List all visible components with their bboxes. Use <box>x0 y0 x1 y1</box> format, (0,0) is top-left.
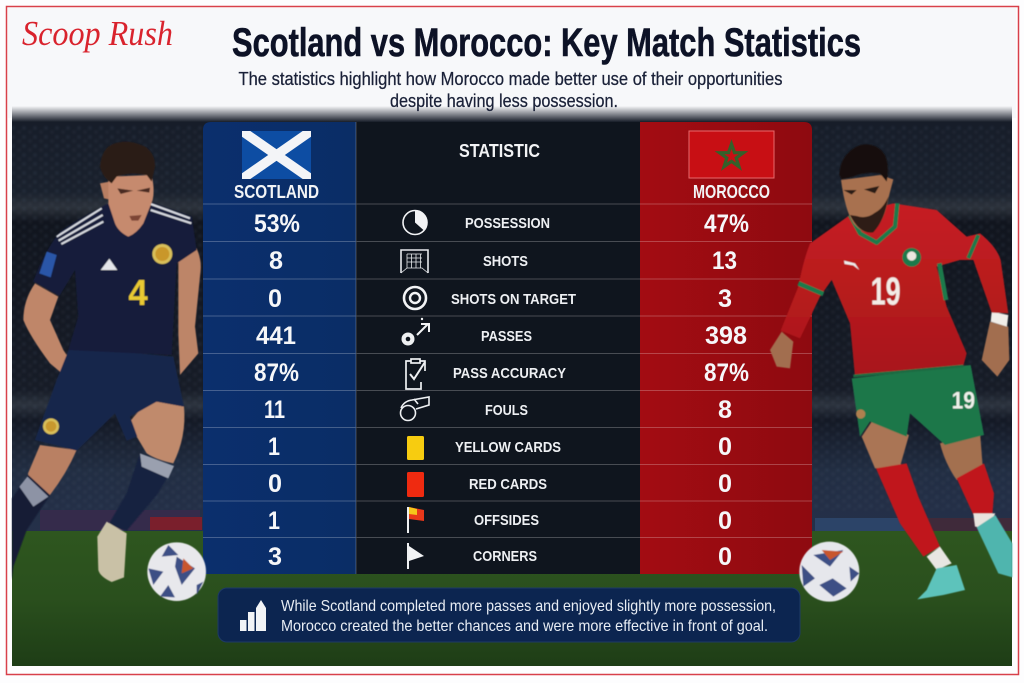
Morocco near leg <box>862 422 965 599</box>
Scotland far leg <box>12 445 77 580</box>
Morocco values: 47% <box>704 210 749 238</box>
Scotland values: 87% <box>254 359 299 387</box>
Scotland arms <box>23 248 201 377</box>
Morocco values: 8 <box>718 396 732 424</box>
callout text: While Scotland completed more passes and enjoyed slightly more possession, <box>281 598 776 615</box>
Scotland shorts <box>35 347 184 451</box>
icon: passes <box>402 318 429 346</box>
Scotland column <box>203 122 356 574</box>
Scotland values: 53% <box>254 210 300 238</box>
icon: rising bars <box>240 600 266 631</box>
Scotland values: 441 <box>256 322 296 350</box>
statistic labels: OFFSIDES <box>474 512 539 529</box>
statistic labels: YELLOW CARDS <box>455 439 561 456</box>
callout text: Morocco created the better chances and were more effective in front of goal. <box>281 618 768 635</box>
Puma mark <box>844 261 859 270</box>
statistic labels: PASS ACCURACY <box>453 365 566 382</box>
Morocco values: 398 <box>705 322 747 350</box>
icon: clipboard <box>406 359 425 389</box>
Morocco label: MOROCCO <box>693 182 770 202</box>
row dividers <box>203 122 812 574</box>
stadium crowd <box>12 106 1015 536</box>
statistic labels: SHOTS ON TARGET <box>451 291 576 308</box>
Morocco shirt <box>781 203 1008 377</box>
statistic labels: SHOTS <box>483 253 528 270</box>
Scotland near leg <box>97 402 184 582</box>
subtitle: despite having less possession. <box>390 91 618 111</box>
Morocco ball <box>799 542 859 602</box>
stats table <box>203 122 812 574</box>
Scotland values: 0 <box>268 470 282 498</box>
Morocco far leg <box>940 432 1012 577</box>
Scotland stripes <box>57 204 191 244</box>
statistic heading: STATISTIC <box>459 141 540 161</box>
title: Scotland vs Morocco: Key Match Statistics <box>232 21 861 65</box>
Scotland sleeve badge <box>39 252 57 277</box>
Morocco shorts <box>852 365 984 445</box>
callout panel <box>218 588 800 642</box>
logo: Scoop Rush <box>22 14 173 53</box>
statistic labels: CORNERS <box>473 548 537 565</box>
Scotland values <box>254 210 300 571</box>
Morocco hands <box>770 312 1009 377</box>
icon: whistle <box>400 397 429 420</box>
icon: yellow card <box>407 436 424 460</box>
Morocco values: 13 <box>712 247 737 275</box>
Scotland values: 0 <box>268 285 282 313</box>
Scotland label: SCOTLAND <box>234 182 319 202</box>
Morocco shorts number: 19 <box>952 387 975 414</box>
Scotland values: 11 <box>264 396 285 424</box>
icon: possession pie <box>403 210 427 234</box>
Morocco flag <box>689 131 774 178</box>
Morocco column <box>640 122 812 574</box>
player: Scotland <box>12 142 206 601</box>
Morocco values <box>704 210 749 571</box>
Morocco crest <box>856 248 921 419</box>
Scotland values: 3 <box>268 543 282 571</box>
Morocco head <box>839 144 893 233</box>
callout <box>218 588 800 642</box>
icon: offside flag <box>407 507 424 533</box>
Morocco number: 19 <box>871 269 901 313</box>
Scotland ball <box>147 542 206 601</box>
icon: goal <box>401 250 428 273</box>
subtitle <box>238 69 782 111</box>
Morocco trim <box>798 203 978 376</box>
pitch <box>12 531 1012 666</box>
Scotland values: 1 <box>268 433 280 461</box>
callout text <box>281 598 776 635</box>
player: Morocco <box>770 144 1012 602</box>
statistic labels: PASSES <box>481 328 532 345</box>
top fade <box>12 106 1012 122</box>
statistic labels <box>451 215 576 565</box>
statistic labels: FOULS <box>485 402 528 419</box>
statistic labels: POSSESSION <box>465 215 550 232</box>
statistic labels: RED CARDS <box>469 476 547 493</box>
Morocco values: 87% <box>704 359 749 387</box>
Morocco values: 0 <box>718 433 732 461</box>
Scotland values: 1 <box>268 507 280 535</box>
Morocco values: 0 <box>718 507 732 535</box>
Morocco values: 0 <box>718 470 732 498</box>
Scotland shirt <box>33 202 197 355</box>
icon: target <box>404 287 426 309</box>
Scotland flag <box>242 131 311 179</box>
Scotland values: 8 <box>269 247 283 275</box>
subtitle: The statistics highlight how Morocco made better use of their opportunities <box>238 69 782 89</box>
Scotland crest <box>43 244 172 434</box>
icon: corner flag <box>407 543 424 569</box>
icon: red card <box>407 472 424 497</box>
Morocco values: 3 <box>718 285 732 313</box>
Adidas mark <box>101 259 117 270</box>
Scotland number: 4 <box>128 272 148 313</box>
header band <box>8 8 1016 118</box>
statistic column <box>356 122 640 574</box>
Scotland head <box>100 142 155 237</box>
Morocco values: 0 <box>718 543 732 571</box>
